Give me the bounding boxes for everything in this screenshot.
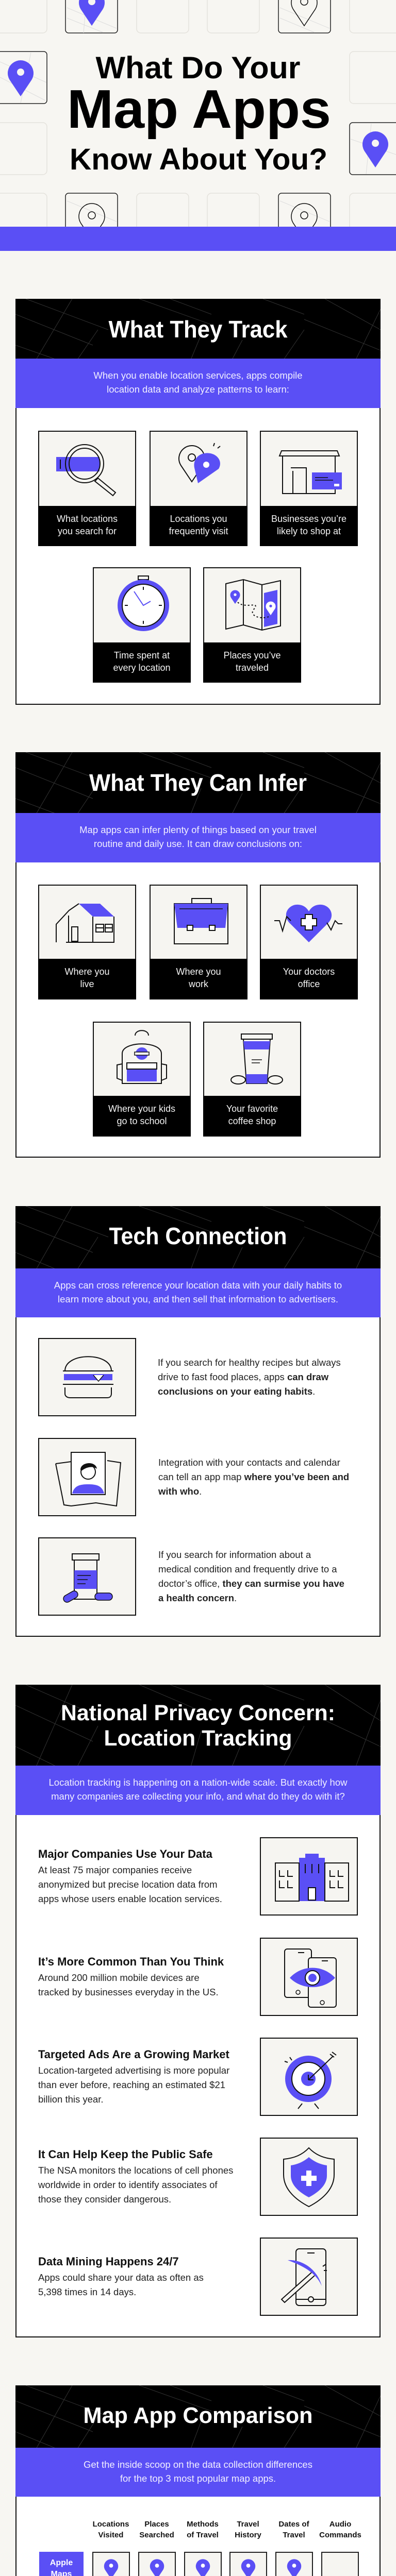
title [67,50,331,176]
card: places traveled [203,567,301,683]
card: coffee: coffee shop [228,1116,276,1126]
heading: Tech Connection: Tech Connection [109,1223,287,1249]
card: school: Where your kids [108,1104,175,1114]
card: home: Where you [64,967,110,977]
card: time spent: Time spent at [114,650,170,660]
intro text: for the top 3 most popular map apps. [120,2473,276,2484]
stat: major companies: anonymized but precise location data from [38,1879,218,1890]
stat: targeted ads [38,2048,229,2105]
icon: phone with pickaxe [260,2238,358,2316]
icon: shield [260,2138,358,2216]
card: search [38,431,136,546]
heading: Map App Comparison [15,2385,381,2449]
icon: contact photo [38,1438,136,1516]
stat: targeted ads: Location-targeted advertising is more popular [38,2065,229,2076]
card: frequent visits: frequently visit [169,526,228,536]
stat: data mining: 5,398 times in 14 days. [38,2286,136,2297]
text: eating habits [158,1357,341,1397]
heading: Tech Connection [15,1206,381,1269]
intro text: When you enable location services, apps compile [93,370,303,381]
text: health concern: If you search for information about a [158,1549,311,1560]
stat: more common [38,1955,224,1997]
icon: bottom tile outline pin 1 [65,193,118,245]
panel: what they track [15,299,381,705]
card: coffee [203,1022,301,1137]
column headers: Places [144,2520,169,2529]
card: businesses: Businesses you’re [271,514,346,524]
card: work [150,885,248,999]
column headers: Travel [283,2531,305,2539]
card: frequent visits [150,431,248,546]
panel: national privacy concern [15,1685,381,2337]
column headers: Audio [329,2520,351,2529]
column headers: History [235,2531,261,2539]
card: work: work [189,979,208,989]
card: home [38,885,136,999]
card: places traveled: Places you’ve [223,650,281,660]
text: health concern: a health concern. [158,1592,237,1603]
text: eating habits: If you search for healthy recipes but always [158,1357,341,1368]
stat: targeted ads: than ever before, reaching an estimated $21 [38,2079,225,2090]
intro text: Get the inside scoop on the data collection differences [84,2459,312,2470]
text: contacts: can tell an app map where you’ve been and [158,1471,349,1482]
stat: more common: tracked by businesses everyday in the US. [38,1987,219,1997]
column headers: Travel [237,2520,259,2529]
stat: public safe: It Can Help Keep the Public Safe [38,2148,213,2161]
intro text: learn more about you, and then sell that information to advertisers. [58,1294,338,1304]
row: Apple Maps: Apple [50,2558,73,2567]
title: Know About You? [70,143,327,176]
heading: National Privacy Concern: Location Tracking: Location Tracking [104,1726,292,1751]
text: contacts: with who. [158,1486,202,1497]
row: Apple Maps [39,2552,359,2576]
heading: National Privacy Concern: Location Tracking [15,1685,381,1767]
stat: more common: Around 200 million mobile devices are [38,1972,200,1983]
card: search: you search for [58,526,117,536]
stat: data mining [38,2255,204,2297]
heading: What They Can Infer: What They Can Infer [89,769,307,796]
stat: data mining: Data Mining Happens 24/7 [38,2255,179,2268]
card: home: live [80,979,94,989]
heading: What They Track [15,299,381,360]
card: doctor: office [298,979,320,989]
icon: highlighted tile outline pin [278,0,331,33]
panel: tech connection [15,1206,381,1637]
card: businesses [260,431,358,546]
column headers: of Travel [187,2531,219,2539]
intro text: location data and analyze patterns to learn: [107,384,289,395]
column headers: Commands [319,2531,361,2539]
text: health concern: medical condition and frequently drive to a [158,1564,337,1574]
stat: public safe: worldwide in order to identify associates of [38,2179,218,2190]
stat: data mining: Apps could share your data as often as [38,2272,204,2283]
stat: major companies [38,1848,222,1904]
stat: major companies: Major Companies Use Your Data [38,1848,212,1860]
comparison table [39,2520,361,2576]
icon: bottom tile outline pin 2 [278,193,331,245]
title: What Do Your [96,50,300,85]
icon: pill bottle [38,1537,136,1616]
intro text: routine and daily use. It can draw conclusions on: [94,838,302,849]
hero: tile background with pins and title [0,0,396,227]
purple banner bar [0,227,396,251]
intro text: Apps can cross reference your location data with your daily habits to [54,1280,342,1291]
card: businesses: likely to shop at [277,526,341,536]
icon: right tile purple pin [350,123,396,175]
column headers: Methods [187,2520,219,2529]
column headers: Visited [98,2531,123,2539]
text: health concern [158,1549,344,1603]
icon: highlighted tile purple pin [65,0,118,33]
stat: more common: It’s More Common Than You Think [38,1955,224,1968]
card: work: Where you [176,967,221,977]
stat: public safe: those they consider dangerous. [38,2194,171,2205]
column headers: Searched [139,2531,174,2539]
icon: building [260,1837,358,1916]
card: coffee: Your favorite [226,1104,278,1114]
card: doctor [260,885,358,999]
icon: left tile purple pin [0,52,47,104]
card: search: What locations [57,514,118,524]
stat: targeted ads: billion this year. [38,2094,103,2105]
column headers: Dates of [278,2520,309,2529]
stat: major companies: apps whose users enable location services. [38,1893,222,1904]
stat: public safe [38,2148,233,2205]
heading: What They Track: What They Track [108,316,288,343]
stat: targeted ads: Targeted Ads Are a Growing Market [38,2048,229,2061]
intro text: many companies are collecting your info, and what do they do with it? [51,1791,345,1802]
icon: target [260,2038,358,2116]
stat: public safe: The NSA monitors the locations of cell phones [38,2165,233,2176]
text: contacts: Integration with your contacts and calendar [158,1457,340,1468]
icon: burger [38,1338,136,1416]
text: contacts [158,1457,349,1497]
card: time spent: every location [113,663,171,673]
card: doctor: Your doctors [283,967,335,977]
panel: what they can infer [15,752,381,1158]
intro text: Location tracking is happening on a nation-wide scale. But exactly how [48,1777,348,1788]
column headers: Locations [93,2520,129,2529]
panel: map app comparison [15,2385,381,2576]
card: school: go to school [117,1116,167,1126]
title: Map Apps [67,79,331,140]
card: school [93,1022,191,1137]
heading: National Privacy Concern: Location Tracking: National Privacy Concern: [61,1701,335,1725]
stat: major companies: At least 75 major companies receive [38,1865,192,1875]
intro text [15,359,381,408]
card: frequent visits: Locations you [170,514,227,524]
card: time spent [93,567,191,683]
heading: Map App Comparison: Map App Comparison [84,2403,312,2428]
heading: What They Can Infer [15,752,381,814]
text: eating habits: conclusions on your eating habits. [158,1386,315,1397]
card: places traveled: traveled [236,663,269,673]
text: eating habits: drive to fast food places, apps can draw [158,1371,328,1382]
intro text: Map apps can infer plenty of things based on your travel [79,824,317,835]
intro text [15,1268,381,1317]
intro text [15,1766,381,1815]
column headers [93,2520,361,2539]
intro text [15,813,381,862]
text: health concern: doctor’s office, they can surmise you have [158,1578,344,1589]
icon: phones with eye [260,1938,358,2016]
intro text [15,2448,381,2497]
